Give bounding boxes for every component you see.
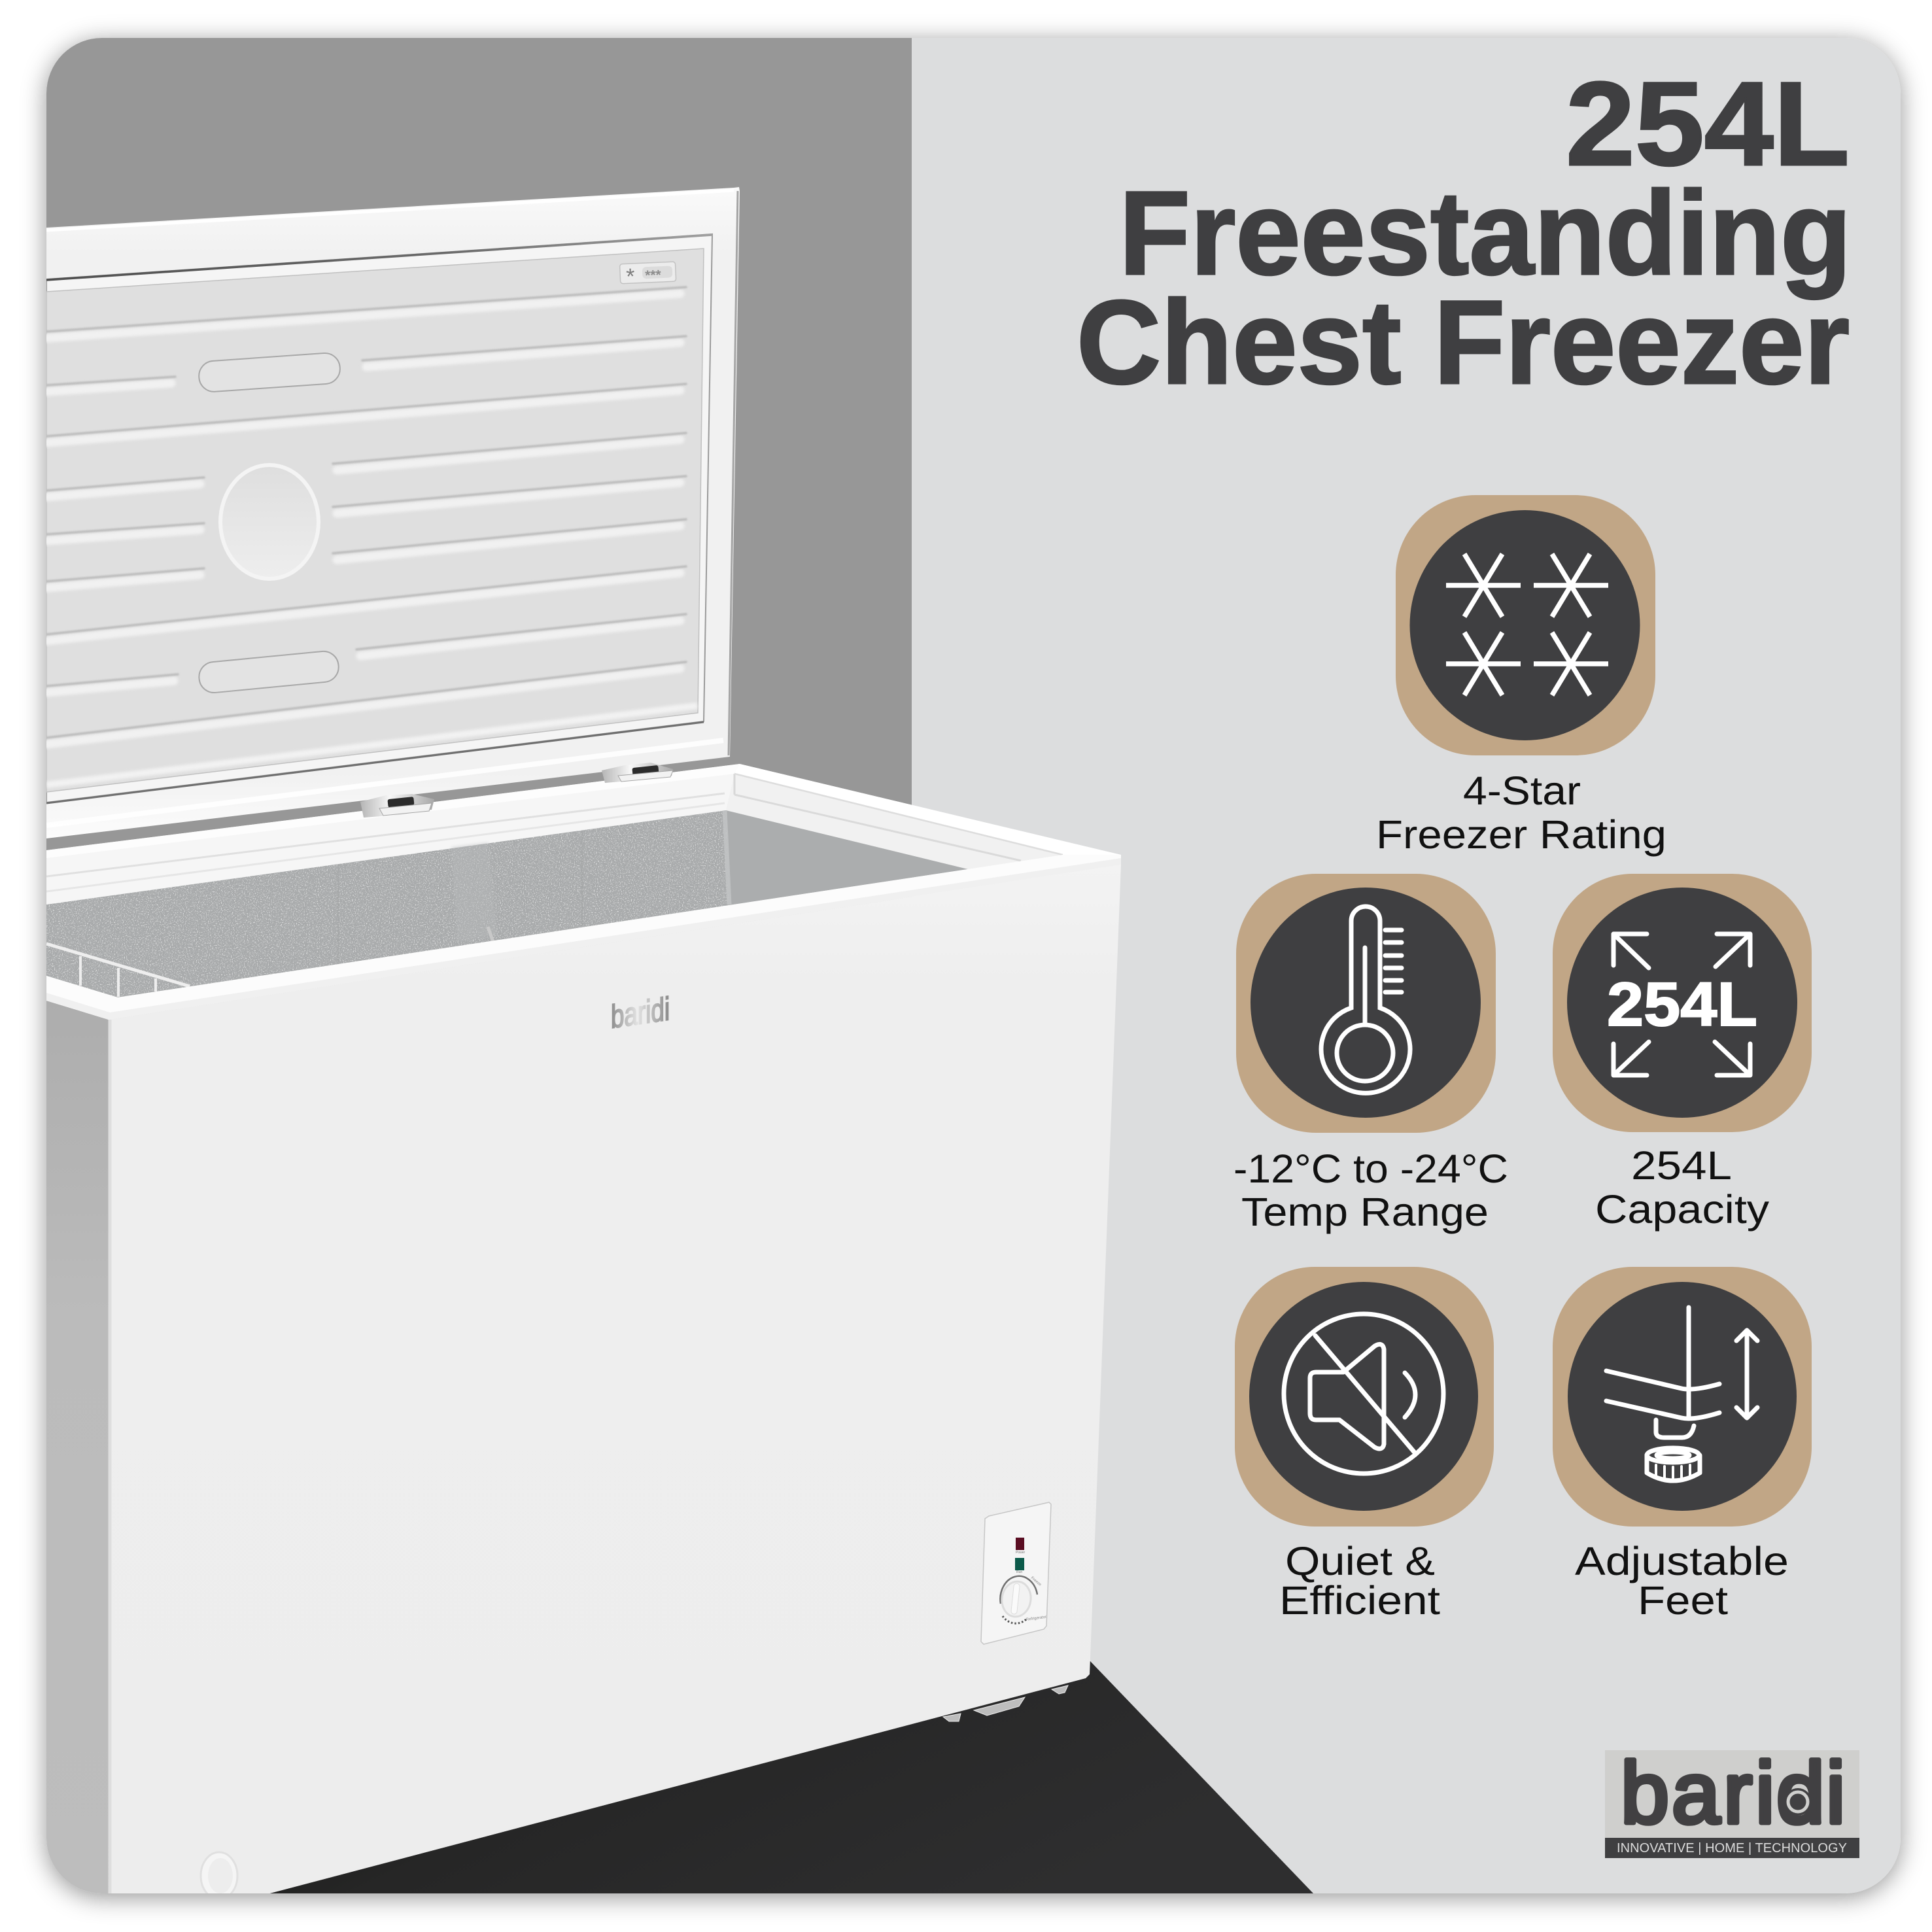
label: adjustable feet: Feet [1638,1578,1728,1623]
control panel: Run [1016,1570,1022,1574]
drain plug [201,1852,237,1899]
liner ribs [46,287,686,744]
lid inner liner [46,249,704,792]
label: capacity: 254L [1631,1143,1732,1188]
left side of freezer cabinet [46,1001,109,1893]
label: quiet and efficient: Efficient [1279,1578,1440,1623]
liner lower handle recess [198,650,340,694]
star rating badge [619,262,676,290]
star rating badge: *** [645,267,662,283]
liner upper handle recess [198,352,341,392]
icon: adjustable foot [1553,1267,1812,1527]
liner round recess [220,465,319,579]
icon: four snowflake stars [1396,495,1655,755]
right inner ledge [726,774,1063,869]
label: 4-star [1376,768,1666,857]
hinge right [602,763,673,783]
dial knob [999,1579,1033,1619]
hinge left [360,794,434,818]
panel: light right background [912,38,1901,1893]
icon: 254L with expand arrows: 254L [1607,970,1757,1039]
cabinet front face [109,865,1121,1895]
control panel [981,1502,1051,1644]
back rim top [46,764,740,858]
wire basket [46,944,190,997]
feature: adjustable feet [1553,1267,1812,1623]
title: Chest Freezer [1077,275,1850,409]
label: temperature range [1233,1147,1508,1234]
lid gasket line [46,234,712,802]
label: 4-star: Freezer Rating [1376,812,1666,857]
icon: 254L with expand arrows [1553,874,1812,1132]
dial scale [1000,1576,1037,1604]
control panel: Freeze [1030,1576,1042,1587]
feature: temperature range [1233,874,1508,1234]
brand mark on cabinet: baridi [611,990,670,1035]
label: quiet and efficient: Quiet & [1285,1539,1435,1583]
title [1077,57,1852,409]
freezer lid [46,187,740,838]
label: adjustable feet: Adjustable [1575,1539,1789,1583]
cabinet rim base [46,764,1121,1020]
freezer cabinet [46,763,1121,1899]
brand wordmark: baridi [1621,1745,1846,1842]
run indicator [1015,1558,1024,1570]
label: adjustable feet [1575,1539,1789,1623]
label: temperature range: Temp Range [1241,1190,1489,1234]
power indicator [1016,1538,1024,1550]
adjustable feet [943,1685,1068,1721]
icon: muted speaker [1235,1267,1494,1527]
brand logo [1605,1745,1859,1858]
label: temperature range: -12°C to -24°C [1233,1147,1508,1191]
title: 254L [1566,57,1850,190]
lid outer frame [46,187,740,838]
control panel: Refrigerator [1026,1615,1047,1622]
label: quiet and efficient [1279,1539,1440,1623]
dark floor [265,1661,1313,1893]
cavity back wall [46,810,729,997]
brand tagline: INNOVATIVE | HOME | TECHNOLOGY [1617,1841,1847,1855]
star rating badge: * [626,264,635,289]
brand wordmark ring detail [1784,1788,1812,1816]
cavity right wall [726,810,968,905]
label: capacity [1595,1143,1770,1232]
label: 4-star: 4-Star [1463,768,1581,813]
title: Freestanding [1119,166,1852,300]
feature: quiet and efficient [1235,1267,1494,1623]
icon: thermometer [1236,874,1496,1133]
control panel: Power [1016,1551,1026,1555]
cabinet front rim [46,855,1121,1020]
feature: 4-star freezer rating [1376,495,1666,857]
feature: capacity [1553,874,1812,1232]
grey wall behind freezer [46,38,912,1019]
label: capacity: Capacity [1595,1187,1770,1232]
